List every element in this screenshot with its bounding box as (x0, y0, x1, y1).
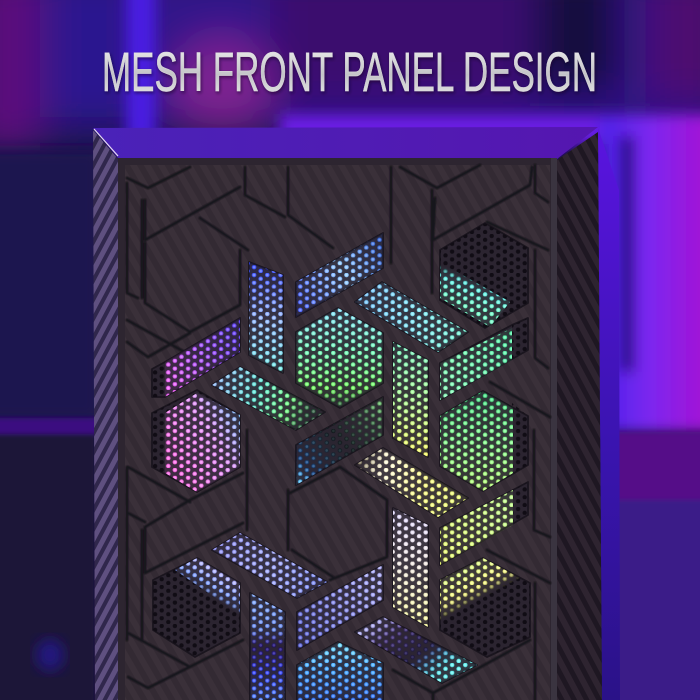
mesh: blue bottom vertical (250, 593, 285, 700)
left carbon bevel (93, 130, 120, 700)
mesh: white vertical (393, 508, 428, 627)
mesh: blue upper parallelogram (296, 233, 383, 317)
mesh: yellow green right parallelogram (440, 490, 513, 565)
mesh: yellow lit part of lower right hexagon (440, 558, 520, 625)
dark mesh base (152, 223, 530, 700)
bevel highlight (94, 129, 118, 156)
mesh: yellow-green vertical (393, 342, 428, 457)
top bevel (93, 127, 598, 159)
right side face (598, 128, 620, 700)
faint LED tint between perforations (165, 233, 520, 700)
mesh: green hexagon (296, 308, 383, 408)
front panel surface (118, 158, 557, 700)
dark mesh perforations (152, 223, 530, 700)
mesh: yellow parallelogram (355, 448, 468, 517)
mesh: dim centre parallelogram (296, 397, 383, 485)
mesh: dim bottom parallelogram (355, 617, 477, 683)
mesh: cyan to green parallelogram (212, 367, 325, 430)
mesh: lavender bottom parallelogram (297, 565, 383, 650)
right carbon bevel (557, 132, 602, 700)
panel grooves (127, 165, 550, 700)
mesh: blue bottom hexagon (297, 642, 383, 700)
mesh: green lower right hexagon (440, 391, 513, 491)
mesh: pink hexagon (165, 393, 240, 492)
bright LED hotspots in perforations (165, 233, 520, 700)
mesh: blue vertical (249, 262, 283, 373)
mesh: purple parallelogram (165, 318, 240, 397)
mesh: teal lit part of upper right hexagon (440, 262, 510, 327)
mesh: blue lit part of lower left hexagon (175, 558, 240, 615)
mesh: lavender lower parallelogram (212, 533, 327, 598)
lit LED mesh panels (165, 233, 520, 700)
mesh: green right parallelogram (440, 328, 512, 400)
PC case (93, 127, 620, 700)
mesh: cyan parallelogram (355, 282, 468, 352)
